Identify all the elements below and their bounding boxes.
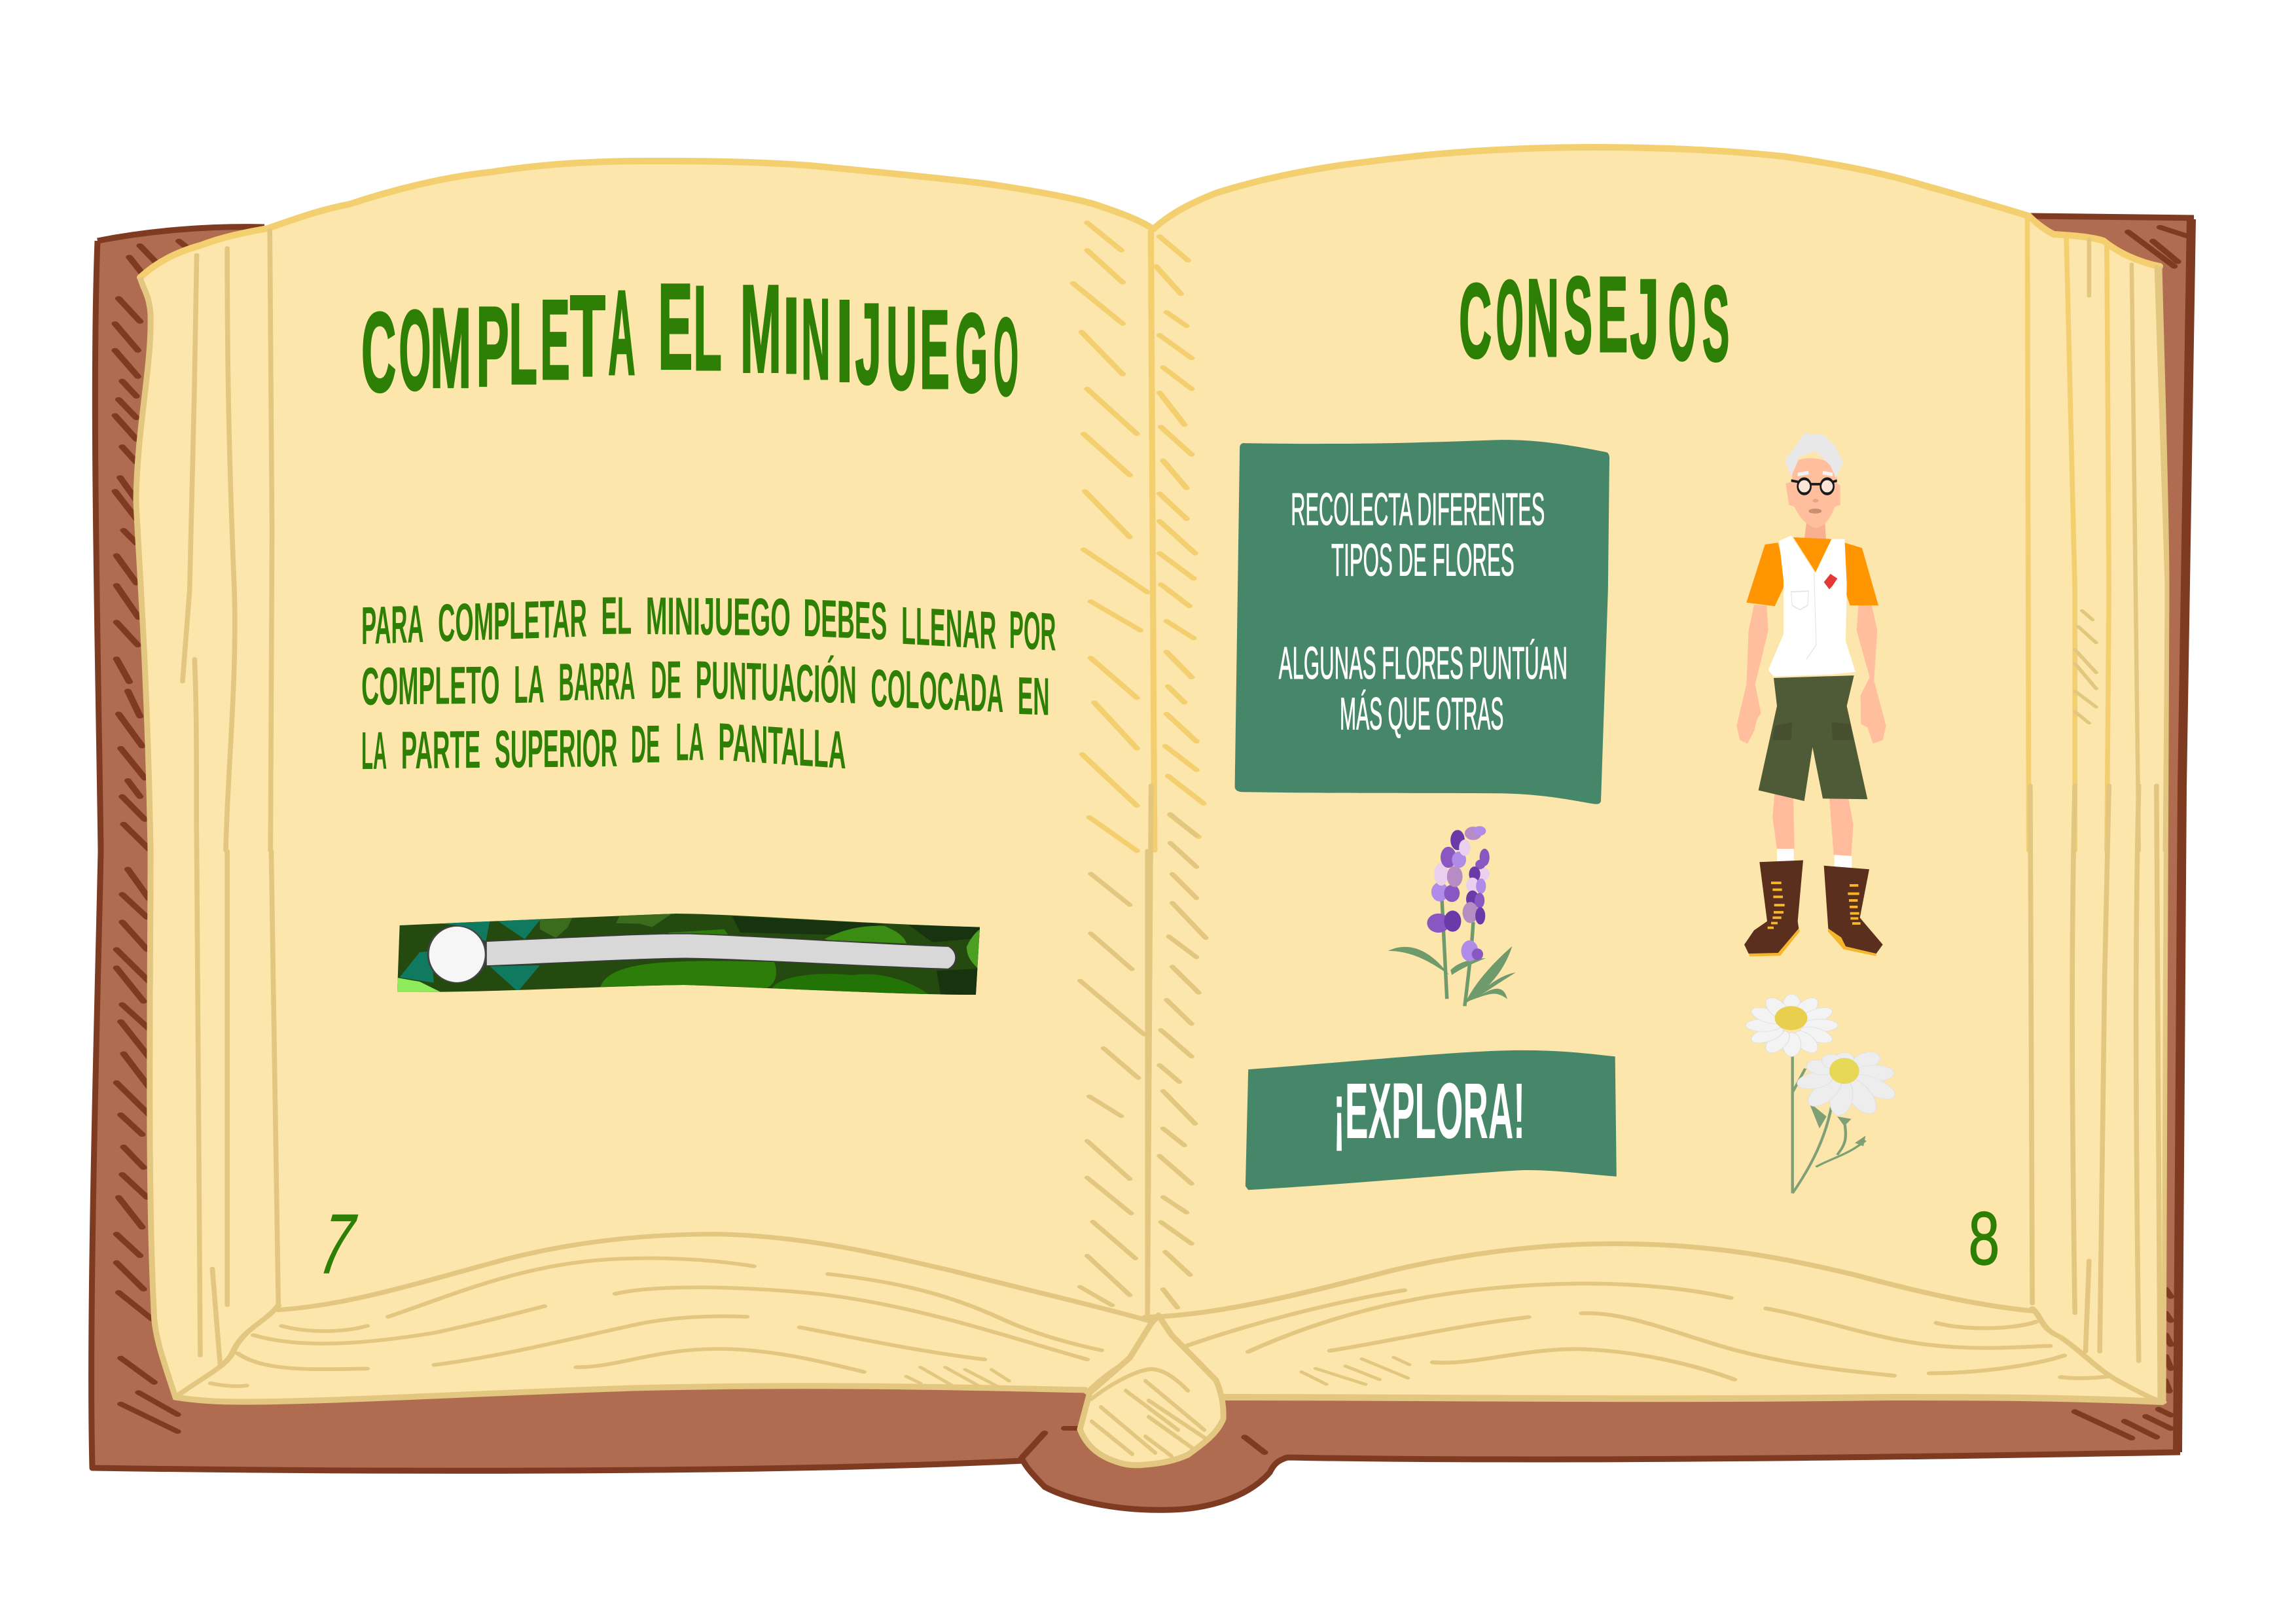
page edge lines and spine hatching, top half	[183, 218, 2167, 851]
left page	[136, 161, 1153, 1402]
heading: Consejos: C	[1459, 262, 1492, 380]
title: Completa el minijuego: E	[920, 287, 950, 412]
text: ¡EXPLORA!	[1333, 1067, 1525, 1155]
text: RECOLECTA DIFERENTES	[1291, 484, 1545, 535]
instructions text	[361, 586, 1056, 781]
page number 8: 8	[1969, 1196, 2000, 1280]
heading: Consejos: J	[1630, 256, 1659, 382]
page bottom folds, left page	[175, 851, 1151, 1397]
title: Completa el minijuego: P	[476, 283, 509, 410]
title: Completa el minijuego: E	[658, 259, 692, 395]
book cover	[92, 215, 2194, 1510]
text: LLENAR	[901, 596, 996, 660]
title: Completa el minijuego: E	[540, 276, 570, 403]
title: Completa el minijuego: M	[430, 285, 471, 411]
title: Completa el minijuego	[361, 259, 1018, 418]
icon: daisy	[1746, 994, 1901, 1193]
heading: Consejos	[1459, 254, 1729, 383]
title: Completa el minijuego: T	[570, 272, 605, 401]
instructions text: LA	[514, 654, 545, 715]
button: explora	[1246, 1050, 1617, 1190]
title: Completa el minijuego: O	[399, 287, 431, 414]
title: Completa el minijuego: L	[693, 260, 722, 395]
title: Completa el minijuego: A	[608, 265, 636, 400]
heading: Consejos: E	[1598, 255, 1628, 374]
tips text	[1279, 484, 1568, 740]
center bookmark tab	[1080, 1315, 1223, 1465]
title: Completa el minijuego: J	[855, 280, 882, 408]
title: Completa el minijuego: N	[801, 276, 831, 403]
text: MÁS QUE OTRAS	[1340, 689, 1503, 740]
title: Completa el minijuego: M	[740, 259, 781, 399]
page bottom folds, right page	[1145, 785, 2164, 1402]
title: Completa el minijuego: I	[836, 276, 853, 406]
instructions text: EL	[601, 586, 632, 646]
text: O	[1668, 261, 1696, 383]
instructions text: MINIJUEGO	[646, 586, 791, 647]
score bar over foliage	[395, 912, 984, 997]
cover hatching	[115, 227, 2189, 1457]
character: explorer	[1736, 433, 1886, 957]
text: EN	[1018, 666, 1050, 726]
instructions text: SUPERIOR	[495, 719, 617, 779]
text: TIPOS DE FLORES	[1331, 535, 1515, 586]
instructions text: PANTALLA	[718, 712, 846, 780]
instructions text: PARTE	[401, 720, 480, 780]
instructions text: COMPLETO	[361, 656, 499, 717]
page number 7: 7	[309, 1196, 366, 1292]
right page	[1149, 147, 2167, 1402]
heading: Consejos: S	[1564, 254, 1592, 376]
instructions text: PARA	[361, 594, 423, 656]
text: S	[1702, 264, 1729, 383]
icon: lavender	[1388, 826, 1516, 1006]
title: Completa el minijuego: I	[783, 276, 800, 396]
instructions text: LA	[361, 721, 387, 781]
instructions text: DEBES	[803, 588, 887, 651]
instructions text: COMPLETAR	[438, 588, 587, 653]
text: ALGUNAS FLORES PUNTÚAN	[1279, 638, 1568, 688]
instructions text: DE	[651, 651, 681, 710]
instructions text: PUNTUACIÓN	[696, 650, 857, 715]
text: O	[994, 296, 1018, 418]
text: COLOCADA	[870, 658, 1003, 724]
title: Completa el minijuego: C	[361, 289, 396, 416]
text: POR	[1009, 600, 1056, 662]
heading: Consejos: O	[1496, 258, 1524, 382]
instructions text: BARRA	[558, 651, 636, 712]
text: G	[955, 291, 988, 416]
heading: Consejos: N	[1526, 257, 1559, 380]
title: Completa el minijuego: L	[509, 280, 537, 408]
instructions text: LA	[675, 712, 704, 772]
panel: tips	[1235, 440, 1609, 804]
instructions text: DE	[631, 715, 660, 774]
title: Completa el minijuego: U	[886, 282, 917, 414]
